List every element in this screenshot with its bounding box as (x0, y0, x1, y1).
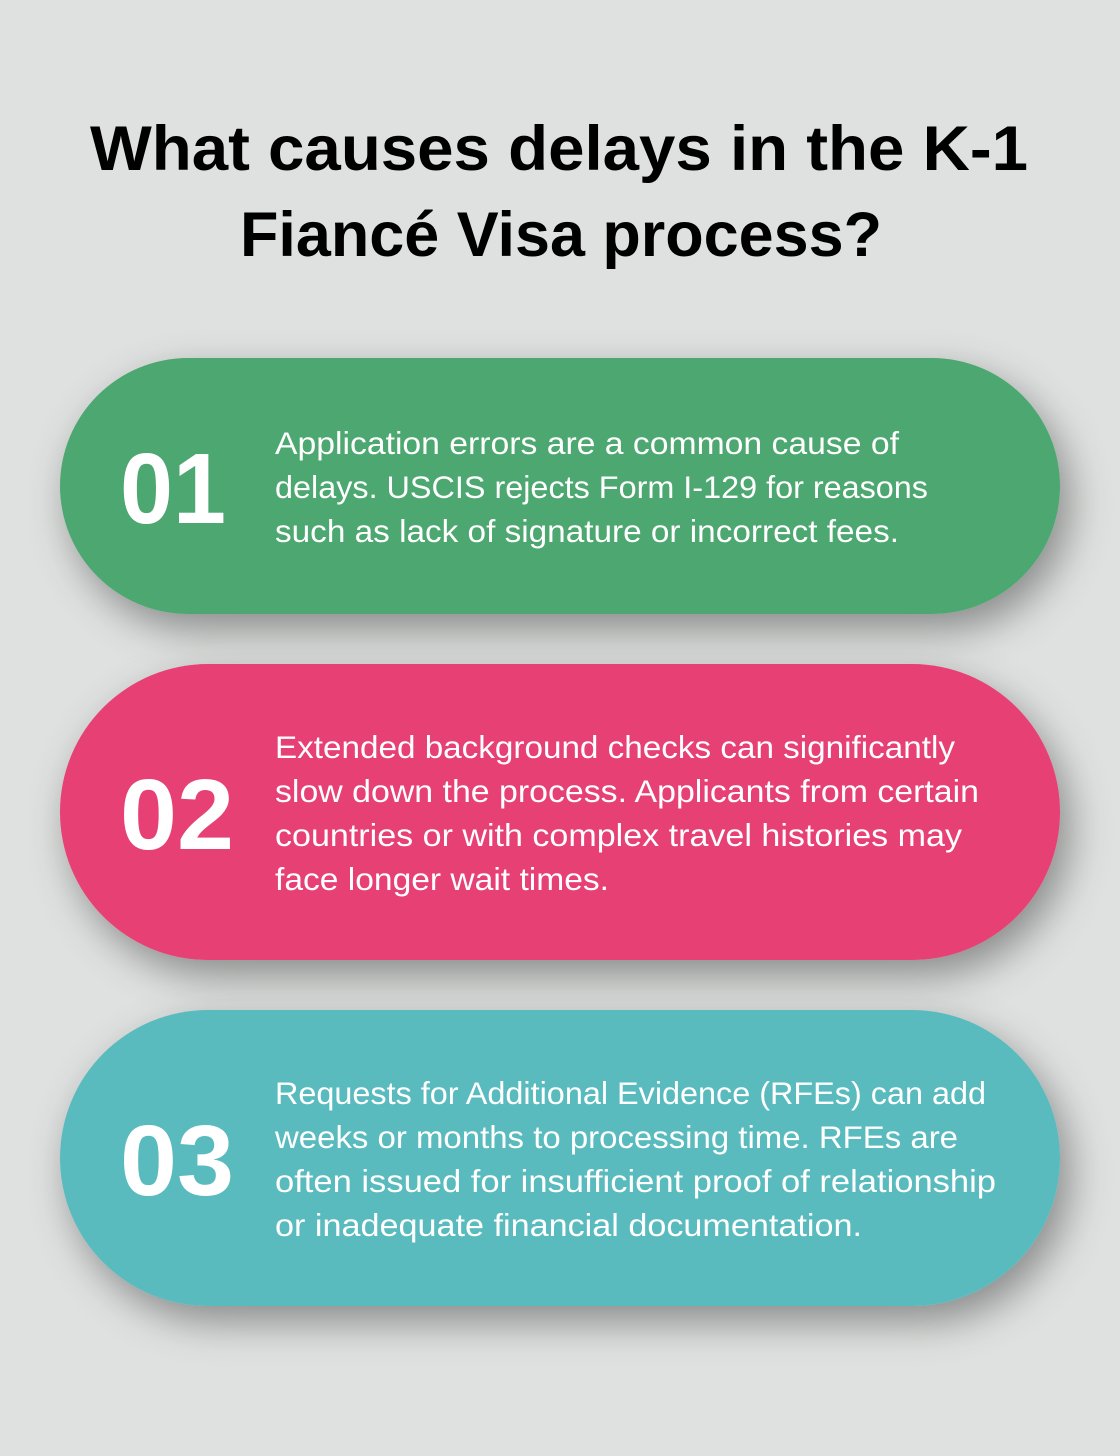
number 01: 01 (120, 433, 226, 545)
number 02: 02 (120, 759, 234, 871)
title: What causes delays in the K-1 (90, 114, 1028, 184)
body text 03: or inadequate financial documentation. (275, 1207, 862, 1243)
teal pill background (60, 1010, 1060, 1306)
title (90, 114, 1028, 270)
green pill background (60, 358, 1060, 614)
panel: cause 03 requests for evidence (60, 1010, 1060, 1306)
body text 02: face longer wait times. (275, 861, 609, 897)
body text 01 (275, 425, 928, 549)
body text 03: weeks or months to processing time. RFEs are (274, 1119, 958, 1155)
number 03: 03 (120, 1105, 234, 1217)
body text 02 (275, 729, 979, 897)
panel: cause 02 background checks (60, 664, 1060, 960)
body text 02: slow down the process. Applicants from certain (275, 773, 979, 809)
body text 03: often issued for insufficient proof of relationship (275, 1163, 996, 1199)
body text 01: Application errors are a common cause of (275, 425, 899, 461)
pink pill background (60, 664, 1060, 960)
body text 03: Requests for Additional Evidence (RFEs) can add (275, 1075, 986, 1111)
body text 02: countries or with complex travel histories may (275, 817, 962, 853)
panel: cause 01 application errors (60, 358, 1060, 614)
body text 01: such as lack of signature or incorrect fees. (275, 513, 899, 549)
body text 02: Extended background checks can significantly (275, 729, 955, 765)
title: Fiancé Visa process? (240, 200, 882, 270)
body text 03 (274, 1075, 996, 1243)
body text 01: delays. USCIS rejects Form I-129 for reasons (275, 469, 928, 505)
